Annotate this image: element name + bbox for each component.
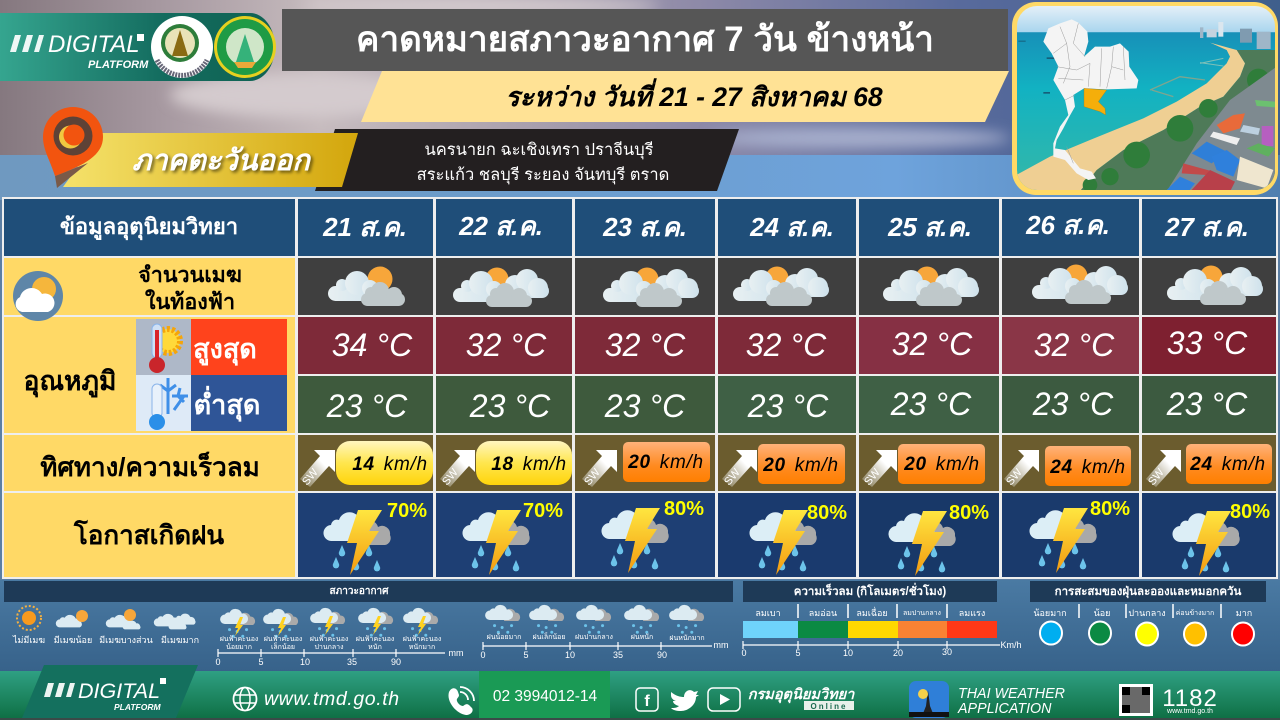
row: minimum temperature: 23 °C — [1032, 386, 1114, 422]
region name banner: ภาคตะวันออก — [132, 145, 312, 177]
header row: 23 ส.ค. — [602, 212, 687, 242]
legend background — [0, 580, 1280, 672]
date banner — [361, 71, 1009, 122]
region name banner — [63, 133, 358, 187]
row: maximum temperature: 32 °C — [605, 327, 686, 363]
thunderstorm legend: ฝนฟ้าคะนอง — [356, 635, 394, 643]
row: rain chance: 80% — [664, 498, 704, 520]
social media: Online — [811, 702, 847, 711]
qr code and hotline: 1182 — [1162, 685, 1218, 712]
rain legend: ฝนปานกลาง — [575, 634, 613, 641]
thunderstorm legend: 90 — [391, 657, 401, 667]
rain legend: 0 — [480, 650, 486, 660]
qr code and hotline: www.tmd.go.th — [1166, 708, 1213, 715]
region provinces panel: สระแก้ว ชลบุรี ระยอง จันทบุรี ตราด — [417, 166, 669, 185]
thunderstorm legend: mm — [448, 648, 464, 658]
row: rain chance: 80% — [1230, 501, 1270, 523]
legend: dust and smoke: ค่อนข้างมาก — [1176, 609, 1214, 617]
header row — [4, 199, 1276, 256]
icon: cold thermometer with min label — [136, 375, 287, 431]
row: maximum temperature: 34 °C — [332, 327, 413, 363]
row: minimum temperature — [298, 376, 1276, 433]
logo strip: digital platform — [0, 13, 276, 81]
row label: temperature: อุณหภูมิ — [24, 366, 116, 398]
rain legend: mm — [714, 640, 728, 650]
wind speed colour bar — [743, 621, 997, 638]
legend: dust and smoke: น้อย — [1094, 608, 1110, 618]
thunderstorm legend: ฝนฟ้าคะนอง — [310, 635, 348, 643]
map of thailand — [1043, 19, 1138, 180]
cloud cover legend icons: ไม่มีเมฆ — [12, 635, 45, 645]
row: wind: ทิศทาง/ความเร็วลม — [40, 451, 260, 482]
icon: cold thermometer with min label: ต่ำสุด — [194, 385, 260, 422]
legend: dust and smoke: การสะสมของฝุ่นละอองและหมอกควัน — [1055, 585, 1241, 599]
weather app — [909, 681, 1065, 718]
rain legend: 35 — [613, 650, 623, 660]
header row: 22 ส.ค. — [458, 211, 543, 241]
row: wind: 20 km/h — [762, 455, 839, 476]
dust level dots — [1040, 622, 1254, 646]
row: minimum temperature: 23 °C — [604, 388, 686, 424]
row: rain chance: โอกาสเกิดฝน — [73, 519, 224, 550]
legend: wind speed: 20 — [893, 648, 903, 658]
legend: dust and smoke — [1030, 581, 1266, 646]
cloud cover legend icons: มีเมฆน้อย — [54, 635, 92, 645]
website: www.tmd.go.th — [264, 688, 400, 710]
legend: dust and smoke: ปานกลาง — [1128, 608, 1166, 618]
thunderstorm legend: 0 — [215, 657, 221, 667]
row: maximum temperature: 32 °C — [1034, 327, 1115, 363]
title banner: คาดหมายสภาวะอากาศ 7 วัน ข้างหน้า — [356, 20, 934, 59]
row: rain chance: 70% — [523, 500, 563, 522]
row: wind: 20 km/h — [627, 452, 704, 473]
row: minimum temperature: 23 °C — [326, 388, 408, 424]
thunderstorm legend: 35 — [347, 657, 357, 667]
row: maximum temperature: 32 °C — [746, 327, 827, 363]
thunderstorm legend: ฝนฟ้าคะนอง — [264, 635, 302, 643]
legend: weather conditions: สภาวะอากาศ — [330, 586, 389, 597]
header row: 27 ส.ค. — [1164, 212, 1249, 242]
emblem: digital economy ministry — [151, 16, 213, 78]
icon: location pin — [43, 107, 103, 188]
row: cloud cover: จำนวนเมฆ — [138, 263, 242, 287]
thunderstorm legend — [215, 608, 464, 667]
phone: 02 3994012-14 — [493, 688, 598, 705]
phone — [448, 671, 610, 718]
header row: 21 ส.ค. — [322, 212, 407, 242]
thunderstorm legend: ฝนฟ้าคะนอง — [220, 635, 258, 643]
cloud cover legend icons — [12, 606, 199, 645]
row: wind: 18 km/h — [491, 454, 567, 475]
beach photo with map — [1012, 2, 1280, 197]
legend: wind speed: 30 — [942, 647, 952, 657]
legend: wind speed: 0 — [741, 648, 747, 658]
row: wind — [4, 435, 1276, 491]
rain legend: ฝนหนักมาก — [669, 634, 705, 642]
thunderstorm legend: น้อยมาก — [226, 643, 252, 651]
cloud cover legend icons: มีเมฆบางส่วน — [99, 635, 153, 645]
thunderstorm legend: เล็กน้อย — [271, 642, 295, 651]
row: minimum temperature: 23 °C — [1166, 386, 1248, 422]
social media: กรมอุตุนิยมวิทยา — [748, 687, 855, 704]
skyline — [1200, 22, 1271, 49]
legend: wind speed: ความเร็วลม (กิโลเมตร/ชั่วโมง) — [794, 582, 946, 598]
row: rain chance — [4, 493, 1276, 577]
legend: wind speed: 5 — [795, 648, 801, 658]
footer logo: PLATFORM — [114, 702, 162, 712]
legend: weather conditions — [4, 581, 733, 667]
region provinces panel: นครนายก ฉะเชิงเทรา ปราจีนบุรี — [424, 141, 654, 160]
thunderstorm legend: หนักมาก — [409, 643, 435, 651]
row: minimum temperature: 23 °C — [890, 386, 972, 422]
logo text: digital — [10, 31, 149, 71]
row: wind: 14 km/h — [352, 454, 428, 475]
forecast table — [2, 197, 1278, 579]
row: cloud cover: ในท้องฟ้า — [145, 288, 235, 314]
legend: wind speed: ลมอ่อน — [809, 608, 837, 618]
row: wind: 24 km/h — [1189, 454, 1266, 475]
header row: 24 ส.ค. — [749, 212, 834, 242]
row: rain chance: 80% — [949, 502, 989, 524]
legend: dust and smoke: น้อยมาก — [1033, 608, 1067, 618]
legend: wind speed: Km/h — [1000, 640, 1022, 650]
legend: wind speed: ลมเบา — [755, 608, 781, 618]
date banner: ระหว่าง วันที่ 21 - 27 สิงหาคม 68 — [505, 78, 883, 112]
cloud cover legend icons: มีเมฆมาก — [161, 635, 199, 645]
footer logo: DIGITAL — [78, 679, 160, 703]
qr code and hotline — [1119, 684, 1218, 716]
legend: dust and smoke: มาก — [1236, 608, 1252, 618]
row: maximum temperature: 32 °C — [466, 327, 547, 363]
thunderstorm legend: ปานกลาง — [314, 644, 344, 651]
legend: wind speed: 10 — [843, 648, 853, 658]
social media — [636, 687, 855, 711]
row label: temperature — [4, 317, 295, 433]
rain legend: ฝนเล็กน้อย — [533, 632, 565, 641]
icon: hot thermometer with max label — [136, 319, 287, 375]
logo text: digital: PLATFORM — [88, 59, 149, 71]
row: maximum temperature: 33 °C — [1167, 325, 1248, 361]
thunderstorm legend: ฝนฟ้าคะนอง — [403, 635, 441, 643]
logo text: digital: DIGITAL — [48, 31, 140, 58]
region provinces panel — [315, 129, 739, 191]
emblem: meteorological department — [214, 16, 276, 78]
row: rain chance: 80% — [807, 502, 847, 524]
region name banner: ภาคตะวันออก — [134, 147, 314, 179]
weather app: APPLICATION — [957, 701, 1052, 717]
rain legend — [480, 605, 728, 660]
row: rain chance: 70% — [387, 500, 427, 522]
thunderstorm legend: หนัก — [368, 643, 382, 651]
row: wind: 24 km/h — [1049, 457, 1126, 478]
thunderstorm legend: 10 — [300, 657, 310, 667]
row: rain chance: 80% — [1090, 498, 1130, 520]
row: minimum temperature: 23 °C — [747, 388, 829, 424]
row: wind: 20 km/h — [903, 454, 980, 475]
trees — [1083, 69, 1270, 192]
rain legend: 10 — [565, 650, 575, 660]
legend: wind speed: ลมแรง — [959, 608, 985, 618]
header row: 26 ส.ค. — [1025, 210, 1110, 240]
rain legend: ฝนหนัก — [631, 633, 653, 641]
icon: sun and cloud badge — [13, 271, 63, 321]
rain legend: 5 — [523, 650, 529, 660]
rain legend: ฝนน้อยมาก — [487, 633, 521, 641]
row: cloud cover — [4, 258, 1276, 315]
row: minimum temperature: 23 °C — [469, 388, 551, 424]
weather app: THAI WEATHER — [958, 686, 1065, 702]
header row: ข้อมูลอุตุนิยมวิทยา — [60, 214, 238, 241]
row: maximum temperature — [298, 317, 1276, 374]
footer logo — [22, 665, 198, 718]
thunderstorm legend: 5 — [258, 657, 264, 667]
header row: 25 ส.ค. — [887, 212, 972, 242]
legend: wind speed: ลมเฉื่อย — [856, 606, 888, 618]
legend: wind speed — [741, 581, 1022, 658]
row: maximum temperature: 32 °C — [892, 326, 973, 362]
title banner — [282, 9, 1008, 71]
social media: f — [644, 693, 650, 710]
icon: hot thermometer with max label: สูงสุด — [193, 334, 257, 366]
legend: wind speed: ลมปานกลาง — [903, 610, 941, 617]
rain legend: 90 — [657, 650, 667, 660]
footer band — [0, 665, 1280, 720]
sky background — [0, 0, 1280, 200]
